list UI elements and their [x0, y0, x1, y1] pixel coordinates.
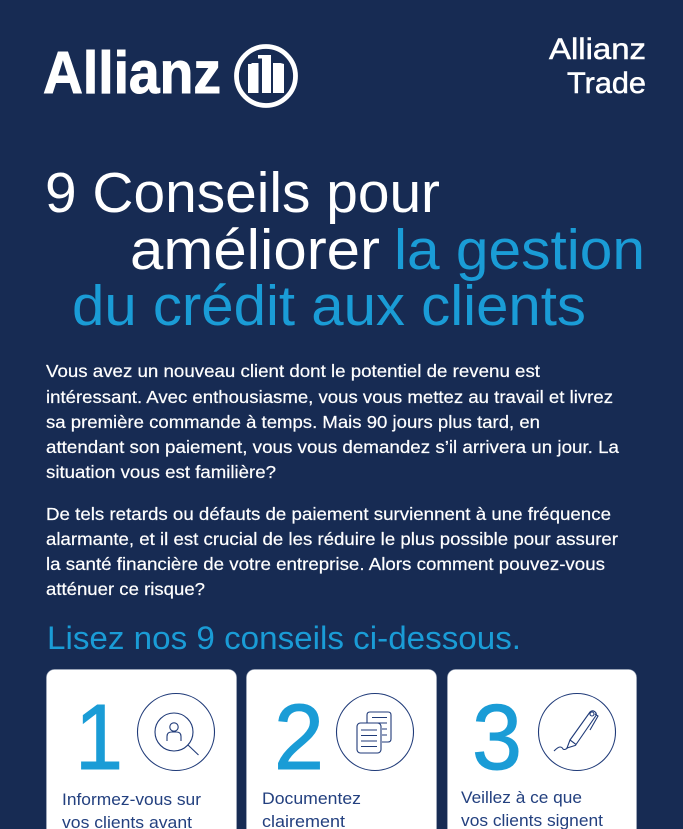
logo wordmark: Allianz: [43, 40, 221, 106]
brand name: Allianz Trade: [549, 33, 646, 100]
number 3: 3: [472, 685, 522, 789]
title: la gestion: [394, 218, 645, 282]
icon: documents: [336, 694, 414, 770]
intro paragraph 1: situation vous est familière?: [46, 462, 276, 482]
card 2 text: [262, 790, 361, 829]
intro paragraph 2: [46, 504, 618, 599]
card 2 text: Documentez: [262, 790, 361, 808]
icon: pen signing: [538, 694, 616, 770]
card 3: [448, 670, 636, 829]
intro paragraph 1: attendant son paiement, vous vous demandez s’il arrivera un jour. La: [46, 437, 619, 457]
intro paragraph 2: De tels retards ou défauts de paiement surviennent à une fréquence: [46, 504, 611, 524]
intro paragraph 1: intéressant. Avec enthousiasme, vous vous mettez au travail et livrez: [46, 387, 613, 407]
card 3 text: Veillez à ce que: [461, 789, 582, 807]
card 1: [46, 670, 236, 829]
title: 9 Conseils pour: [45, 161, 440, 225]
title: [45, 161, 645, 338]
intro paragraph 1: [46, 361, 619, 482]
intro paragraph 1: sa première commande à temps. Mais 90 jours plus tard, en: [46, 412, 540, 432]
intro paragraph 2: alarmante, et il est crucial de les réduire le plus possible pour assurer: [46, 529, 618, 549]
intro paragraph 2: atténuer ce risque?: [46, 579, 205, 599]
subheading: Lisez nos 9 conseils ci-dessous.: [47, 620, 521, 656]
brand name: Allianz Trade: Allianz: [549, 33, 646, 66]
card 3 text: [461, 789, 603, 829]
logo: Allianz: [43, 40, 296, 106]
number 1: 1: [75, 685, 123, 789]
card 1 text: [62, 791, 202, 829]
card 2: [246, 670, 436, 829]
intro paragraph 2: la santé financière de votre entreprise. Alors comment pouvez-vous: [46, 554, 605, 574]
icon: magnifier over person: [138, 694, 214, 770]
intro paragraph 1: Vous avez un nouveau client dont le potentiel de revenu est: [46, 361, 540, 381]
number 2: 2: [274, 685, 324, 789]
title: du crédit aux clients: [72, 274, 586, 338]
logo emblem: [236, 46, 296, 106]
title: améliorer: [130, 218, 380, 282]
card 1 text: Informez-vous sur: [62, 791, 202, 809]
brand name: Allianz Trade: Trade: [567, 67, 646, 100]
